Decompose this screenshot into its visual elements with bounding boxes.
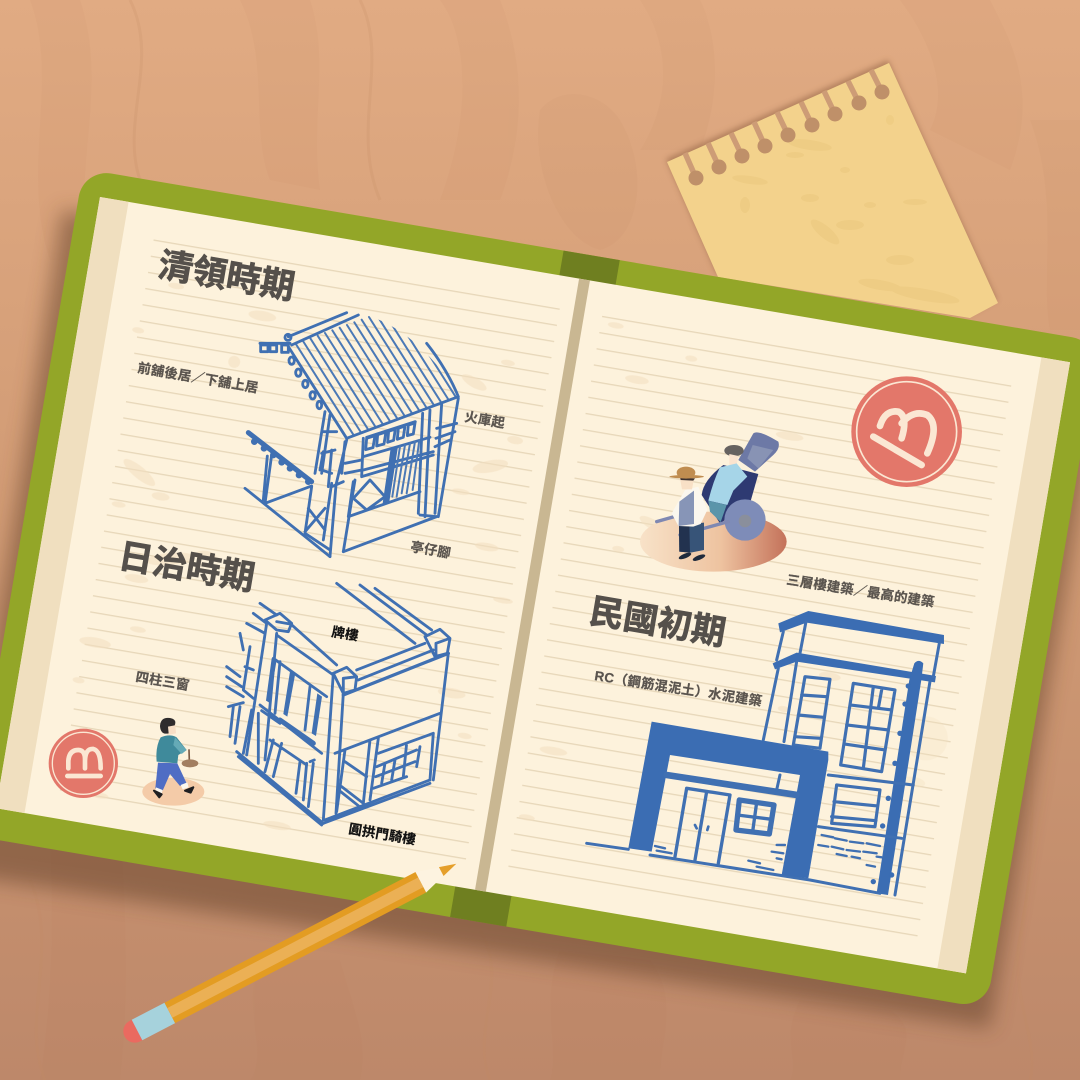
book shadow	[0, 210, 1080, 1028]
passenger	[724, 445, 744, 456]
wheel	[724, 499, 766, 541]
spine fold	[475, 279, 590, 892]
label: 三層樓建築／最高的建築: 三層樓建築／最高的建築	[786, 571, 936, 610]
title: 清領時期: 清領時期	[156, 246, 297, 307]
stamp: small	[49, 729, 118, 798]
puller	[679, 523, 704, 553]
label: 圓拱門騎樓: 圓拱門騎樓	[347, 820, 417, 847]
paper stains	[54, 243, 1008, 938]
hood	[738, 432, 779, 472]
spine tabs	[450, 251, 620, 927]
page margins	[0, 197, 129, 813]
building: early Republic concrete house	[587, 611, 944, 895]
label: 火庫起: 火庫起	[463, 408, 507, 431]
green cover	[0, 169, 1080, 1008]
label: 亭仔腳: 亭仔腳	[409, 538, 452, 561]
stamp: large	[851, 376, 962, 487]
notebook	[0, 169, 1080, 1008]
carriage	[702, 465, 758, 523]
building: Qing shophouse	[245, 306, 458, 557]
title: 日治時期: 日治時期	[116, 537, 257, 598]
shafts	[657, 515, 728, 535]
ruled lines	[58, 231, 561, 872]
spiral note paper	[666, 60, 998, 318]
label: 四柱三窗: 四柱三窗	[134, 668, 191, 693]
building: Japanese era arcade	[227, 583, 450, 825]
label: 前舖後居／下舖上居: 前舖後居／下舖上居	[136, 359, 260, 396]
title: 民國初期: 民國初期	[587, 592, 728, 653]
pencil	[119, 854, 462, 1047]
rickshaw illustration	[640, 432, 787, 572]
label: 牌樓: 牌樓	[330, 623, 360, 644]
walking person illustration	[142, 718, 204, 806]
spiral rings	[685, 70, 890, 186]
label: RC（鋼筋混泥土）水泥建築: RC（鋼筋混泥土）水泥建築	[594, 667, 763, 709]
pages	[0, 197, 1070, 976]
ground shadow	[640, 512, 787, 572]
